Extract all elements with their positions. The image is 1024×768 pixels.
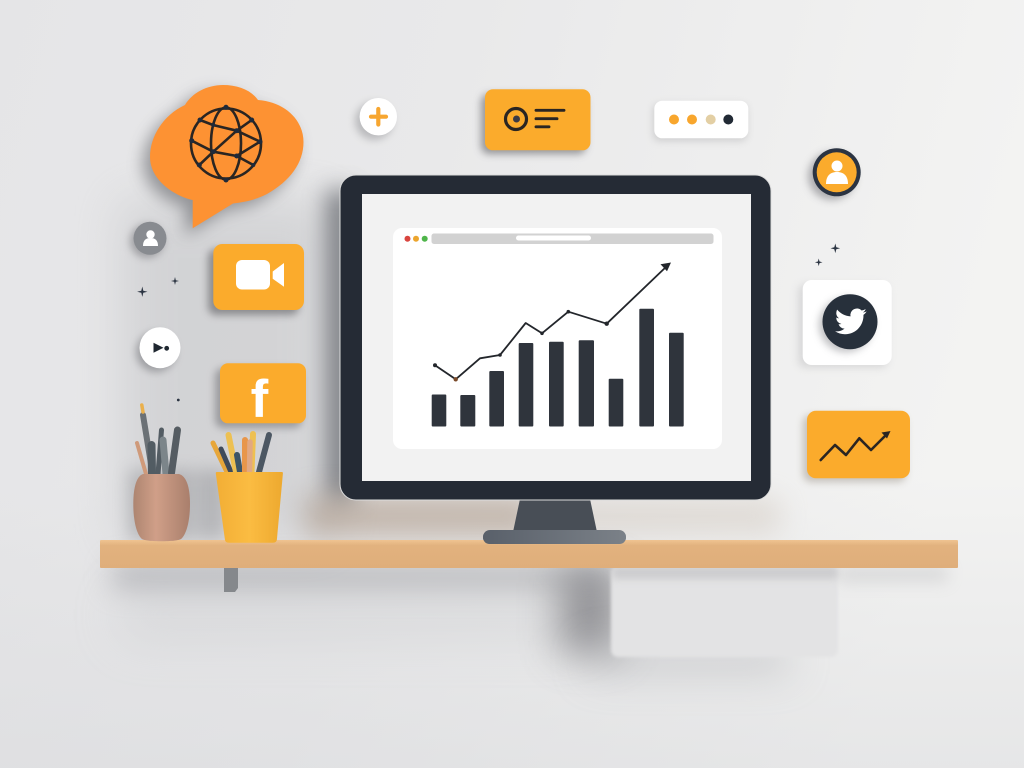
shelf <box>100 540 958 568</box>
icon: twitter tile <box>798 280 892 368</box>
monitor screen <box>362 194 751 481</box>
monitor base front edge <box>483 531 626 544</box>
pens in brown pot <box>137 405 178 474</box>
yellow pencil pot <box>213 434 283 543</box>
icon: video camera tile <box>208 244 304 315</box>
brown pen pot <box>133 405 190 541</box>
icon: grey avatar <box>130 222 166 258</box>
icon: orange avatar <box>808 148 861 200</box>
bar chart <box>432 309 684 426</box>
icon: play circle <box>136 327 180 372</box>
yellow pot body <box>216 472 283 543</box>
icon: trend chart tile <box>803 411 910 482</box>
shelf bracket <box>224 566 238 592</box>
pencils in yellow pot <box>213 434 269 472</box>
stand base <box>483 530 626 544</box>
icon: media card <box>481 89 590 154</box>
speech bubble with globe <box>143 85 304 235</box>
brown pot body <box>133 474 190 541</box>
sparkles <box>137 244 840 401</box>
icon: plus button <box>355 98 397 140</box>
trend line with arrow <box>433 262 671 381</box>
soft shadows on the wall <box>112 190 948 672</box>
stand neck <box>513 499 597 532</box>
globe network icon <box>189 105 262 182</box>
bubble body <box>150 85 304 228</box>
browser panel <box>393 228 722 449</box>
bubble shadow <box>143 92 296 235</box>
icon: facebook tile <box>215 363 306 429</box>
browser window <box>393 228 722 449</box>
icon: dots pill <box>653 101 748 141</box>
monitor stand <box>483 499 626 544</box>
storage box under shelf <box>611 566 838 657</box>
monitor <box>340 175 771 500</box>
monitor bezel <box>340 175 771 500</box>
icon: facebook tile: f <box>251 370 269 429</box>
browser toolbar <box>404 234 714 244</box>
